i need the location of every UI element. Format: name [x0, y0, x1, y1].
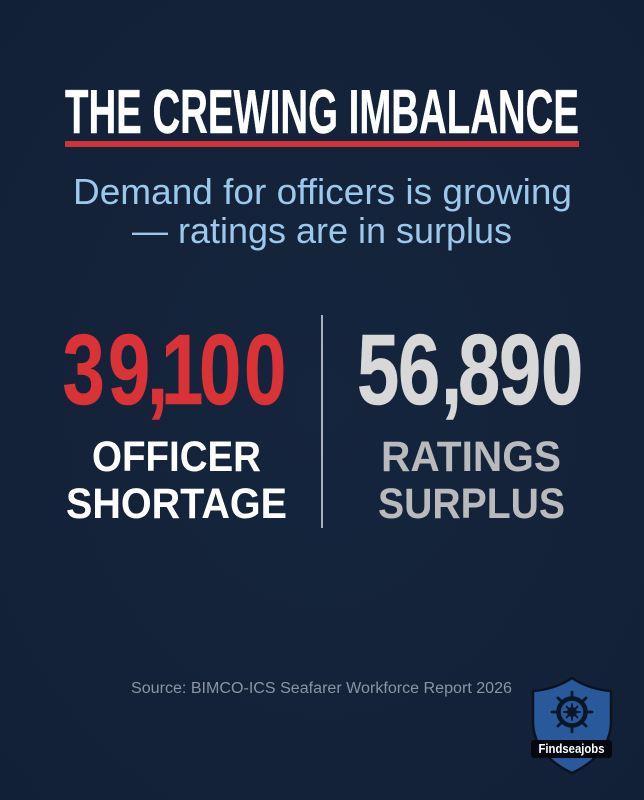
divider — [321, 315, 323, 528]
stat: ratings surplus — [357, 314, 583, 528]
label: officer shortage — [66, 433, 287, 528]
title underline — [65, 141, 579, 147]
icon: shield — [533, 678, 611, 773]
label: ratings surplus: SURPLUS — [378, 480, 565, 528]
label: ratings surplus: RATINGS — [381, 433, 561, 481]
source: Source: BIMCO-ICS Seafarer Workforce Report 2026 — [131, 680, 512, 697]
logo: Findseajobs shield — [531, 678, 612, 773]
label: officer shortage: SHORTAGE — [66, 480, 287, 528]
label: officer shortage: OFFICER — [92, 433, 261, 481]
number: 39,100: 39,100 — [62, 314, 286, 425]
logo label: Findseajobs — [538, 742, 605, 756]
subtitle: Demand for officers is growing — [73, 171, 572, 212]
subtitle — [73, 171, 572, 251]
subtitle: — ratings are in surplus — [132, 210, 512, 251]
number: 56,890: 56,890 — [357, 314, 583, 425]
icon: ship wheel — [552, 692, 592, 732]
label: ratings surplus — [378, 433, 565, 528]
stat: officer shortage — [62, 314, 287, 528]
